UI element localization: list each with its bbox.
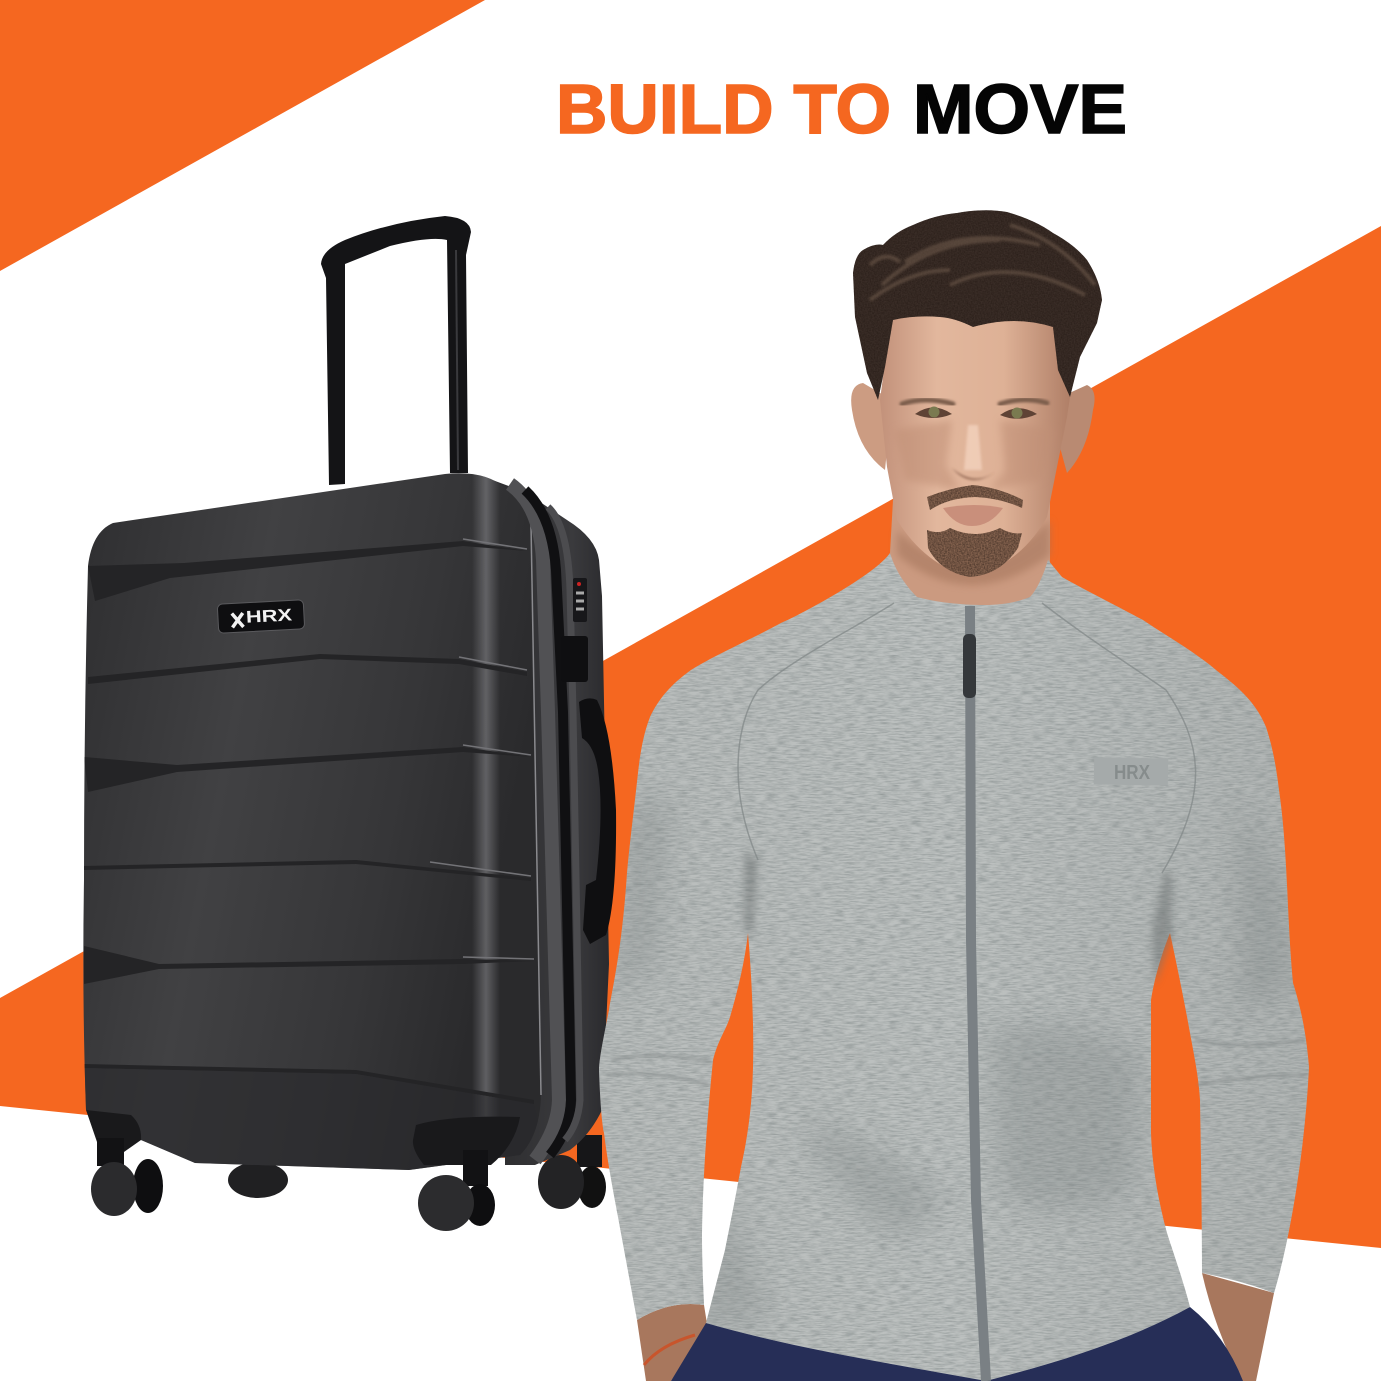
- zipper: [963, 606, 986, 1381]
- side carry handle: [579, 698, 616, 944]
- chest logo: [1094, 757, 1168, 786]
- title: [556, 70, 1127, 148]
- neck shadow: [897, 520, 1050, 585]
- rib wedges: [84, 541, 534, 1104]
- shell ribs and sheen: [84, 470, 552, 1180]
- title: BUILD TO: [556, 70, 891, 148]
- face: [880, 300, 1070, 577]
- HRX badge: [217, 600, 305, 633]
- chest logo: HRX: [1114, 762, 1151, 784]
- elbow folds: [606, 1040, 1308, 1085]
- HRX badge: HRX: [245, 605, 293, 627]
- jacket shading: [615, 800, 1290, 1330]
- vertical sheen: [474, 474, 498, 1117]
- side panel: [487, 478, 609, 1165]
- lips: [943, 505, 1003, 526]
- ears: [851, 383, 1095, 473]
- side grey strip: [548, 507, 580, 1140]
- rib highlights: [430, 539, 534, 959]
- trousers: [671, 1307, 1243, 1381]
- telescopic handle: [321, 216, 471, 485]
- jacket: [599, 553, 1309, 1381]
- armpit shadows: [744, 850, 1172, 985]
- hair: [853, 210, 1102, 400]
- front wheels: [91, 1138, 495, 1231]
- corner bumpers: [86, 1110, 520, 1165]
- title: MOVE: [913, 70, 1127, 148]
- hair highlights: [870, 225, 1095, 300]
- lower panel shade: [84, 1068, 505, 1170]
- wrist band: [644, 1335, 695, 1365]
- nose highlight: [964, 425, 982, 470]
- front shell: [83, 473, 541, 1170]
- nose shadow: [952, 468, 998, 480]
- orange triangle top left: [0, 0, 485, 271]
- eyebrows: [902, 400, 1047, 404]
- front seam: [531, 525, 541, 1095]
- neck: [890, 500, 1050, 612]
- side lock: [561, 578, 588, 682]
- eyes: [915, 406, 1037, 419]
- grey zip tape: [510, 484, 559, 1160]
- hands: [637, 1273, 1274, 1381]
- suitcase: [83, 216, 616, 1231]
- man: [599, 210, 1309, 1381]
- zipper: [525, 490, 571, 1155]
- back wheels: [228, 1135, 606, 1209]
- face shading: [895, 420, 1055, 490]
- raglan seams: [738, 603, 1196, 873]
- orange diagonal band: [0, 226, 1381, 1248]
- beard: [927, 485, 1023, 577]
